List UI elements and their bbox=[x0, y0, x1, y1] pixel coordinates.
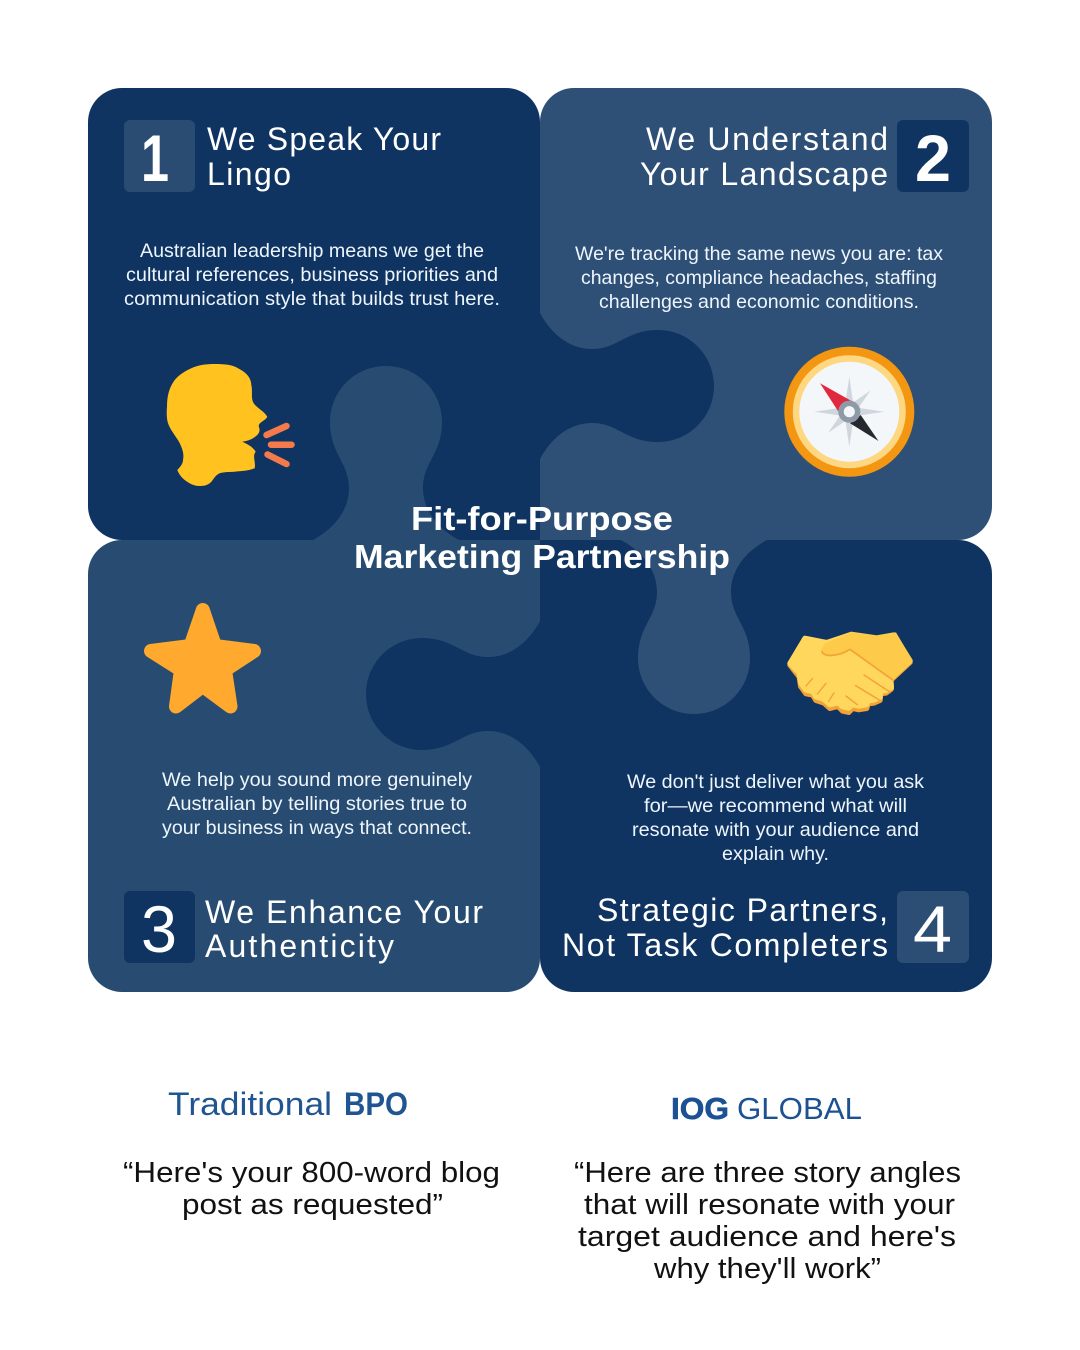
logo: IOG GLOBAL: GLOBAL bbox=[737, 1091, 862, 1126]
body text 3 bbox=[162, 769, 472, 839]
quote: IOG Global: target audience and here's bbox=[578, 1221, 956, 1253]
heading 2 bbox=[640, 121, 888, 192]
quote: IOG Global: “Here are three story angles bbox=[574, 1157, 961, 1189]
number badge 3: 3 bbox=[141, 892, 177, 966]
heading 4 bbox=[562, 892, 888, 963]
heading 1 bbox=[207, 121, 441, 192]
number badge 1: 1 bbox=[141, 121, 169, 195]
body text 1: Australian leadership means we get the bbox=[140, 240, 484, 262]
quote: Traditional BPO: post as requested” bbox=[182, 1189, 443, 1221]
panel: 3 We Enhance Your Authenticity bbox=[88, 540, 540, 992]
puzzle tab from panel 1 bbox=[540, 313, 714, 459]
heading: Traditional BPO: BPO bbox=[344, 1086, 408, 1122]
number badge 4 bbox=[897, 891, 969, 966]
number badge 1 bbox=[124, 120, 195, 195]
heading 4: Strategic Partners, bbox=[597, 892, 888, 928]
number badge 2 bbox=[897, 120, 969, 195]
body text 2 bbox=[575, 243, 943, 313]
heading 4: Not Task Completers bbox=[562, 927, 888, 963]
icon: star bbox=[151, 610, 254, 706]
number badge 4: 4 bbox=[913, 892, 952, 966]
title: Fit-for-Purpose bbox=[411, 500, 673, 537]
panel: 2 We Understand Your Landscape bbox=[540, 88, 992, 540]
body text 4: resonate with your audience and bbox=[632, 819, 919, 841]
heading 1: Lingo bbox=[207, 156, 291, 192]
panel: 1 We Speak Your Lingo bbox=[88, 88, 540, 540]
icon: handshake bbox=[790, 632, 913, 712]
heading: Traditional BPO bbox=[168, 1086, 408, 1122]
body text 2: challenges and economic conditions. bbox=[599, 291, 919, 313]
body text 3: your business in ways that connect. bbox=[162, 817, 472, 839]
puzzle tab from panel 4 bbox=[366, 621, 540, 767]
comparison: IOG Global bbox=[574, 1091, 961, 1285]
body text 4: explain why. bbox=[722, 843, 829, 865]
quote: IOG Global: why they'll work” bbox=[653, 1253, 881, 1285]
icon: compass bbox=[784, 347, 914, 477]
body text 3: Australian by telling stories true to bbox=[167, 793, 467, 815]
heading 1: We Speak Your bbox=[207, 121, 441, 157]
heading 2: Your Landscape bbox=[640, 156, 888, 192]
body text 4 bbox=[627, 771, 924, 865]
quote: Traditional BPO: “Here's your 800-word blog bbox=[123, 1157, 500, 1189]
panel: 4 Strategic Partners, Not Task Completers bbox=[540, 540, 992, 992]
number badge 3 bbox=[124, 891, 195, 966]
puzzle tab from panel 2 bbox=[621, 540, 767, 714]
logo: IOG GLOBAL: IOG bbox=[671, 1091, 729, 1126]
body text 2: changes, compliance headaches, staffing bbox=[581, 267, 937, 289]
heading 3 bbox=[205, 894, 483, 964]
body text 3: We help you sound more genuinely bbox=[162, 769, 472, 791]
body text 1 bbox=[124, 240, 500, 310]
heading: Traditional BPO: Traditional bbox=[168, 1086, 332, 1122]
body text 2: We're tracking the same news you are: tax bbox=[575, 243, 943, 265]
heading 3: We Enhance Your bbox=[205, 894, 483, 930]
quote: Traditional BPO bbox=[123, 1157, 500, 1221]
quote: IOG Global bbox=[574, 1157, 961, 1285]
heading 3: Authenticity bbox=[205, 928, 394, 964]
comparison: Traditional BPO bbox=[123, 1086, 500, 1221]
body text 4: for—we recommend what will bbox=[644, 795, 907, 817]
body text 1: communication style that builds trust here. bbox=[124, 288, 500, 310]
body text 1: cultural references, business priorities and bbox=[126, 264, 498, 286]
body text 4: We don't just deliver what you ask bbox=[627, 771, 924, 793]
number badge 2: 2 bbox=[915, 121, 951, 195]
heading 2: We Understand bbox=[646, 121, 888, 157]
title: Marketing Partnership bbox=[354, 538, 730, 575]
quote: IOG Global: that will resonate with your bbox=[584, 1189, 955, 1221]
icon: speaking head bbox=[167, 364, 292, 486]
title bbox=[354, 500, 730, 575]
puzzle tab from panel 3 bbox=[313, 366, 459, 540]
logo: IOG GLOBAL bbox=[671, 1091, 862, 1126]
